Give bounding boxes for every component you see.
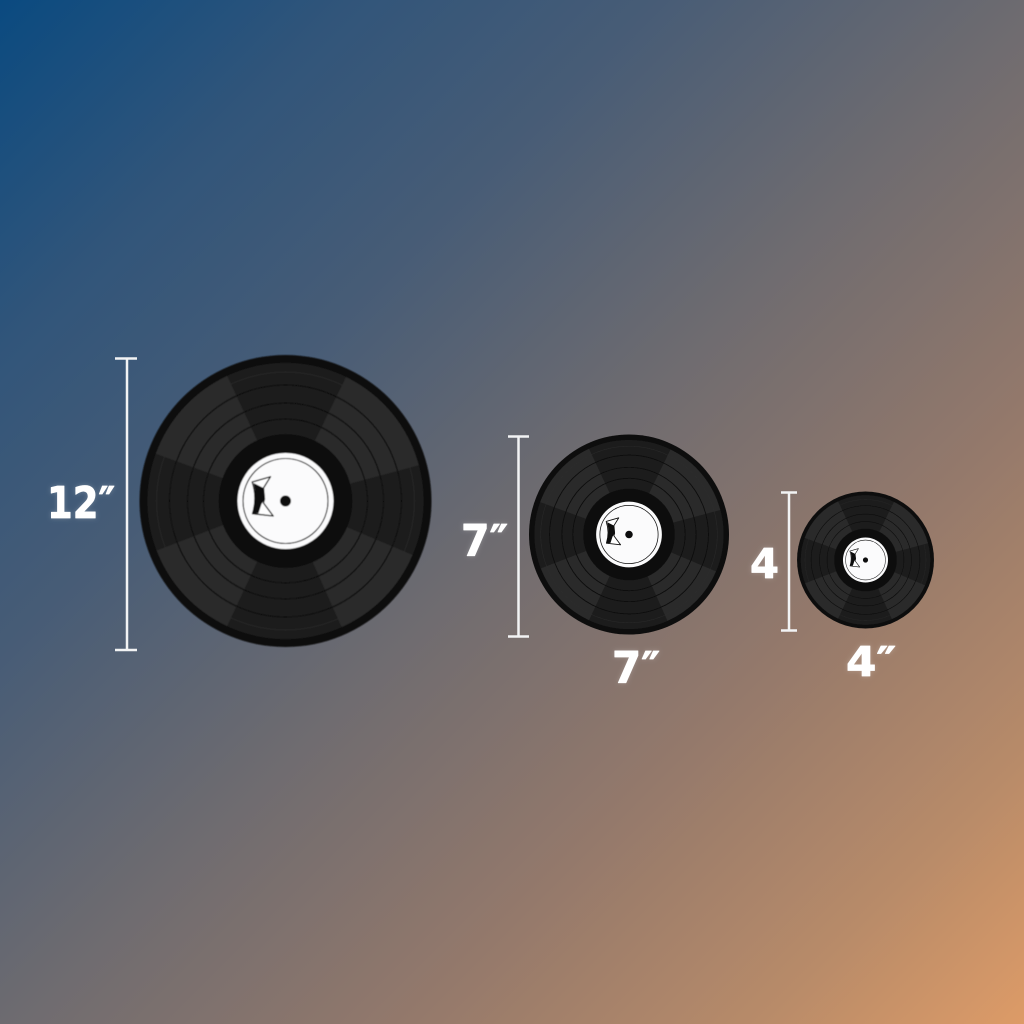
vinyl record: 4 inch xyxy=(797,492,934,628)
dimension line: 7 inch height xyxy=(508,436,529,636)
record group: 12 inch xyxy=(47,355,432,650)
record group: 7 inch xyxy=(461,434,729,694)
grooves and sectors xyxy=(529,434,729,635)
size label: 12 inch: 12″ xyxy=(47,478,115,529)
size label: 4 inch left: 4 xyxy=(750,540,779,588)
record group: 4 inch xyxy=(750,492,934,686)
dimension line: 12 inch height xyxy=(115,358,137,650)
center label with logo and spindle hole xyxy=(238,453,334,549)
center label with logo and spindle hole xyxy=(843,537,888,583)
grooves and sectors xyxy=(797,492,934,628)
grooves and sectors xyxy=(140,355,432,647)
size label: 7 inch left: 7″ xyxy=(461,516,508,567)
vinyl record: 7 inch xyxy=(529,434,729,635)
size label: 4 inch bottom: 4″ xyxy=(846,638,896,686)
center label with logo and spindle hole xyxy=(596,502,662,567)
vinyl record: 12 inch xyxy=(140,355,432,647)
dimension line: 4 inch height xyxy=(781,492,797,630)
size label: 7 inch bottom: 7″ xyxy=(612,643,660,694)
